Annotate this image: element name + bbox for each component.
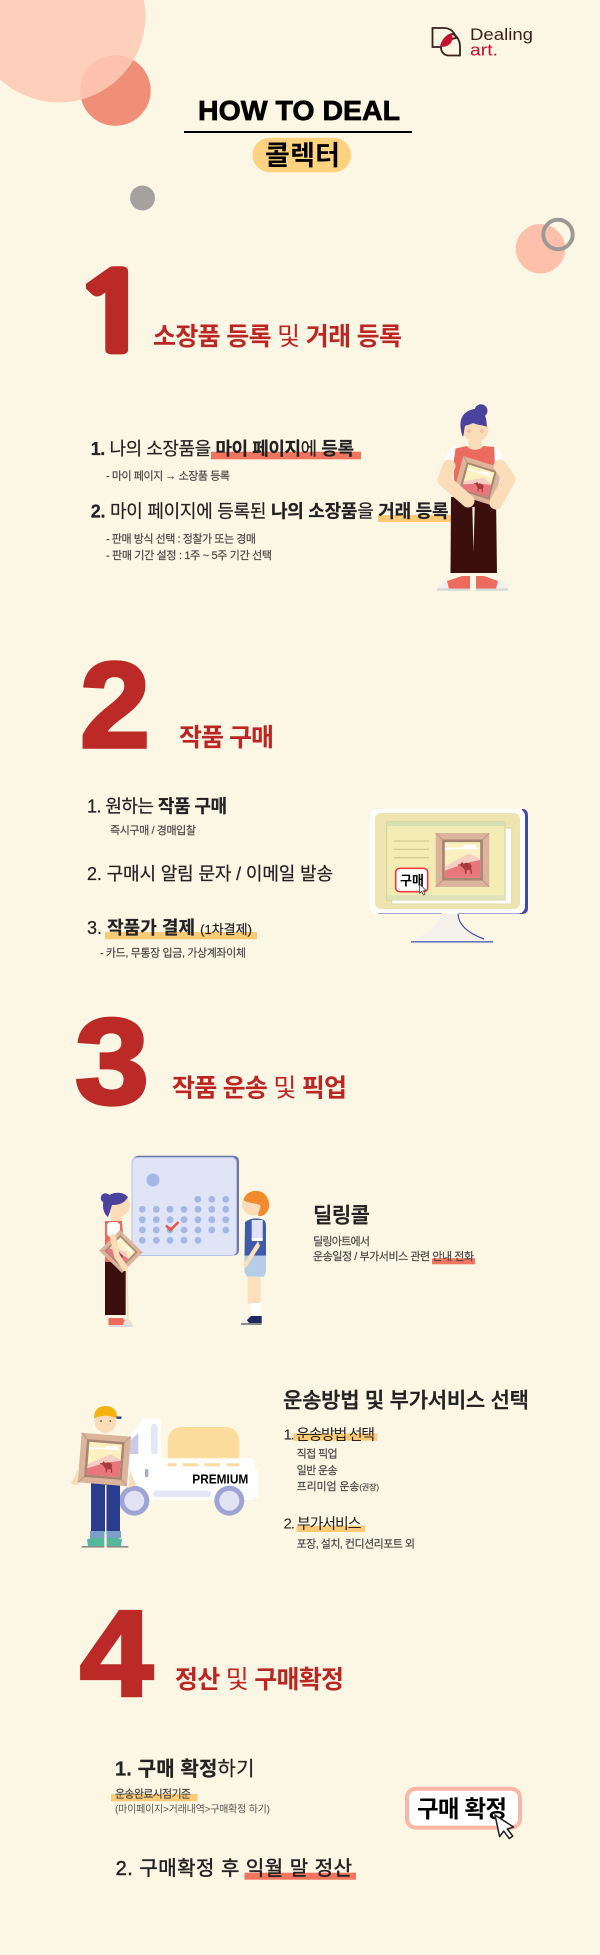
title line one: HOW TO DEAL (198, 95, 400, 126)
highlight (211, 452, 361, 459)
truck label: PREMIUM (192, 1471, 248, 1486)
highlight (244, 1873, 356, 1880)
highlight (294, 1433, 377, 1441)
delivery method heading: 1. 운송방법 선택 (284, 1426, 375, 1443)
step 1 item 2 detail a: - 판매 방식 선택 : 정찰가 또는 경매 (106, 532, 256, 545)
delivery worker (71, 1406, 136, 1548)
step 3 (71, 994, 529, 1550)
step 2 item 2: 2. 구매시 알림 문자 / 이메일 발송 (87, 864, 333, 884)
step 2 item 3: 3. 작품가 결제 (1차결제) (87, 918, 252, 938)
step 1 number: 1 (71, 260, 156, 367)
decorative dot (130, 186, 155, 210)
highlight (105, 932, 257, 939)
highlight (378, 515, 452, 522)
highlight (432, 1258, 475, 1264)
buy button: 구매 (400, 870, 424, 889)
icon: cursor (495, 1812, 516, 1840)
call heading: 딜링콜 (313, 1200, 370, 1230)
step 2 item 1: 1. 원하는 작품 구매 (87, 797, 227, 817)
call text line 1: 딜링아트에서 (313, 1235, 370, 1248)
title (184, 95, 412, 173)
step 1 item 2: 2. 마이 페이지에 등록된 나의 소장품을 거래 등록 (91, 502, 448, 522)
step 1 item 1 detail: - 마이 페이지 → 소장품 등록 (106, 469, 230, 482)
calendar (132, 1156, 239, 1256)
step 4 item 1 path: (마이페이지>거래내역>구매확정 하기) (115, 1802, 270, 1815)
decorative circle with ring (516, 220, 573, 273)
person left with painting (99, 1193, 143, 1327)
truck (118, 1418, 258, 1516)
extra services detail: 포장, 설치, 컨디션리포트 외 (297, 1537, 415, 1550)
delivery method option 3: 프리미엄 운송(권장) (297, 1480, 379, 1493)
step 2 number: 2 (80, 637, 150, 773)
step 2 item 1 detail: 즉시구매 / 경매입찰 (110, 824, 196, 837)
confirm button (407, 1789, 520, 1840)
call text line 2: 운송일정 / 부가서비스 관련 안내 전화 (313, 1249, 474, 1263)
buy button (396, 868, 428, 895)
illustration: monitor with buy button (370, 809, 528, 943)
title pill: 콜렉터 (265, 134, 340, 173)
highlight (297, 1526, 365, 1532)
logo wordmark accent: art. (470, 41, 498, 60)
step 2 item 3 detail: - 카드, 무통장 입금, 가상계좌이체 (100, 947, 246, 960)
step 1 heading: 소장품 등록 및 거래 등록 (153, 323, 402, 351)
step 4 (80, 1586, 520, 1880)
logo: Dealing art (432, 26, 533, 60)
highlight (111, 1794, 198, 1801)
icon: logo mark (432, 28, 460, 56)
confirm button: 구매 확정 (417, 1790, 507, 1824)
logo wordmark: Dealing (470, 26, 533, 44)
step 4 item 1 note: 운송완료시점기준 (115, 1788, 191, 1801)
illustration: truck and delivery worker (71, 1406, 258, 1548)
step 1 (71, 260, 509, 591)
step 1 item 1: 1. 나의 소장품을 마이 페이지에 등록 (91, 439, 354, 459)
step 3 number: 3 (75, 994, 149, 1130)
step 3 heading: 작품 운송 및 픽업 (172, 1075, 347, 1103)
person right (240, 1191, 269, 1325)
illustration: calendar with two people (99, 1156, 269, 1327)
illustration: person holding painting (437, 404, 509, 591)
step 4 number: 4 (80, 1586, 153, 1722)
decorative circles top left (0, 0, 151, 126)
delivery method option 1: 직접 픽업 (297, 1448, 338, 1461)
step 2 heading: 작품 구매 (179, 724, 274, 752)
delivery heading: 운송방법 및 부가서비스 선택 (283, 1384, 529, 1414)
delivery method option 2: 일반 운송 (297, 1463, 338, 1477)
extra services heading: 2. 부가서비스 (284, 1515, 362, 1532)
step 1 item 2 detail b: - 판매 기간 설정 : 1주 ~ 5주 기간 선택 (106, 549, 272, 562)
step 4 heading: 정산 및 구매확정 (175, 1666, 344, 1694)
step 4 item 2: 2. 구매확정 후 익월 말 정산 (116, 1857, 352, 1880)
step 4 item 1: 1. 구매 확정하기 (115, 1758, 254, 1781)
step 2 (80, 637, 528, 960)
